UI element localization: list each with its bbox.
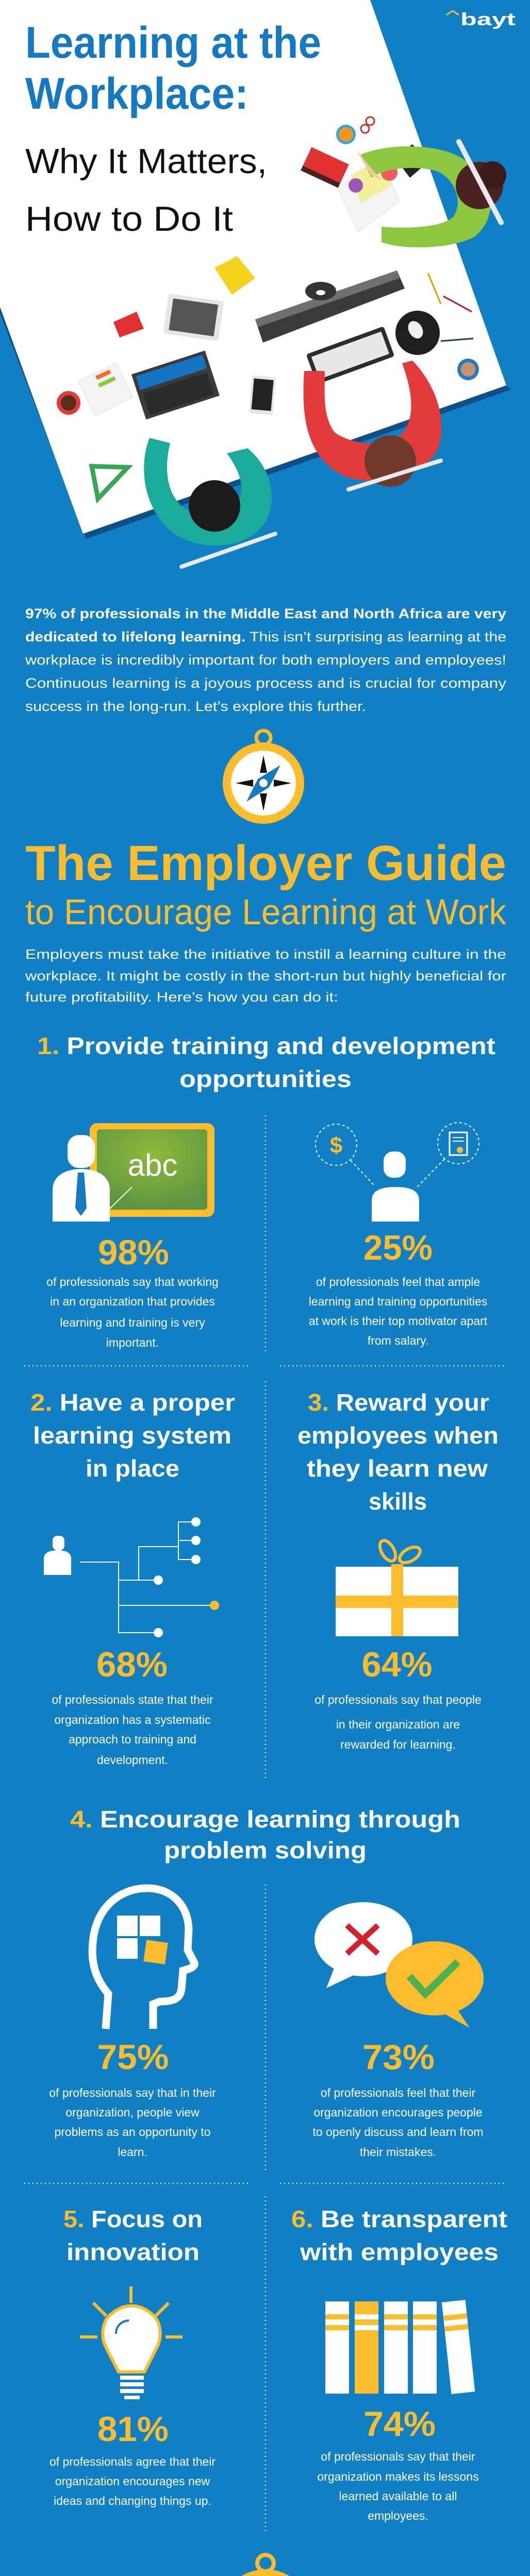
- stat: 81%: ideas and changing things up.: [54, 2494, 211, 2507]
- stat: 68%: [52, 1645, 213, 1767]
- heading 1: [37, 1032, 495, 1092]
- icon: orange cup: [336, 125, 356, 144]
- icon: green person: [356, 142, 506, 247]
- stat: 98%: of professionals say that working: [46, 1275, 219, 1289]
- intro paragraph: success in the long-run. Let’s explore this further.: [25, 699, 366, 714]
- intro paragraph: Continuous learning is a joyous process and is crucial for company: [25, 675, 507, 691]
- icon: teacher with board: abc: [128, 1148, 177, 1182]
- icon: glasses: [361, 117, 374, 133]
- stat: 81%: [49, 2410, 216, 2507]
- employer intro text: [25, 946, 506, 1005]
- stat: 74%: [317, 2404, 479, 2522]
- icon: compass 2: [220, 2555, 311, 2576]
- heading 2: [30, 1389, 235, 1482]
- heading 5: 5. Focus on: [63, 2206, 203, 2232]
- heading: employer guide: The Employer Guide: [25, 836, 506, 891]
- stat: 25%: 25%: [363, 1228, 433, 1267]
- icon: blue coffee: [457, 359, 479, 380]
- stat: 73%: 73%: [362, 2038, 435, 2077]
- icon: papers and tablet: [338, 144, 428, 232]
- heading 4: problem solving: [164, 1837, 367, 1863]
- heading 6: [291, 2206, 507, 2265]
- intro paragraph: [25, 606, 507, 714]
- stat: 64%: of professionals say that people: [314, 1693, 482, 1706]
- icon: person with salary and certificate: $: [330, 1133, 342, 1158]
- icon: head with puzzle: [92, 1888, 194, 2029]
- icon: green triangle: [92, 466, 128, 499]
- stat: 73%: [312, 2038, 484, 2159]
- stat: 68%: development.: [97, 1753, 168, 1767]
- stat: 75%: learn.: [118, 2145, 147, 2159]
- heading 3: skills: [369, 1488, 427, 1515]
- title: [25, 18, 321, 239]
- heading 1: 1. Provide training and development: [37, 1032, 495, 1059]
- logo: bayt top: bayt: [460, 10, 516, 29]
- heading 1: opportunities: [179, 1065, 352, 1092]
- stat: 74%: 74%: [363, 2404, 436, 2444]
- icon: phone: [249, 375, 276, 415]
- stat: 75%: 75%: [97, 2038, 169, 2077]
- icon: keyboard: [306, 326, 394, 384]
- stat: 98%: [46, 1233, 219, 1349]
- stat: 81%: organization encourages new: [55, 2475, 210, 2488]
- stat: 74%: learned available to all: [339, 2489, 457, 2503]
- stat: 64%: 64%: [362, 1645, 432, 1684]
- stat: 25%: [309, 1228, 488, 1347]
- icon: gift: [336, 1538, 458, 1636]
- stat: 75%: problems as an opportunity to: [54, 2125, 211, 2139]
- stat: 98%: 98%: [98, 1233, 169, 1272]
- stat: 74%: organization makes its lessons: [317, 2470, 479, 2483]
- stat: 73%: their mistakes.: [360, 2145, 436, 2159]
- stat: 64%: rewarded for learning.: [340, 1738, 456, 1751]
- employer intro text: workplace. It might be costly in the short-run but highly beneficial for: [25, 968, 506, 984]
- stat: 68%: of professionals state that their: [52, 1693, 213, 1706]
- icon: learning system tree: [44, 1517, 219, 1637]
- employer intro text: future profitability. Here’s how you can do it:: [25, 989, 338, 1005]
- icon: books: [325, 2300, 475, 2394]
- stat: 74%: employees.: [368, 2509, 428, 2522]
- stat: 73%: of professionals feel that their: [321, 2086, 476, 2099]
- intro paragraph: dedicated to lifelong learning. This isn’t surprising as learning at the: [25, 629, 506, 645]
- stat: 75%: organization, people view: [65, 2106, 200, 2119]
- heading 3: employees when: [297, 1422, 499, 1449]
- icon: teal person: [144, 438, 275, 567]
- icon: red book: [301, 147, 349, 188]
- heading 3: 3. Reward your: [308, 1389, 489, 1416]
- title: Workplace:: [25, 69, 249, 118]
- icon: monitor: [255, 270, 405, 343]
- stat: 25%: learning and training opportunities: [309, 1295, 487, 1308]
- heading 6: with employees: [300, 2239, 499, 2265]
- stat: 68%: approach to training and: [69, 1733, 196, 1746]
- stat: 81%: of professionals agree that their: [49, 2455, 216, 2468]
- stat: 81%: 81%: [97, 2410, 169, 2449]
- heading 2: in place: [86, 1455, 179, 1482]
- heading 5: innovation: [67, 2239, 200, 2265]
- stat: 64%: [314, 1645, 482, 1751]
- heading 6: 6. Be transparent: [291, 2206, 507, 2232]
- dividers: [24, 1115, 506, 2576]
- icon: laptop: [131, 350, 220, 419]
- icon: person with salary and certificate: [316, 1123, 479, 1222]
- stat: 68%: 68%: [96, 1645, 168, 1684]
- stat: 73%: organization encourages people: [313, 2106, 483, 2119]
- icon: tablet: [163, 294, 224, 341]
- heading 3: they learn new: [307, 1455, 488, 1482]
- desk illustration: [0, 0, 511, 567]
- stat: 68%: organization has a systematic: [55, 1713, 210, 1726]
- stat: 73%: to openly discuss and learn from: [312, 2125, 484, 2139]
- stat: 98%: learning and training is very: [60, 1316, 205, 1329]
- stat: 64%: in their organization are: [336, 1718, 460, 1731]
- logo: bayt top: [446, 10, 516, 29]
- stat: 75%: of professionals say that in their: [49, 2086, 216, 2099]
- title: Why It Matters,: [25, 142, 267, 181]
- icon: small red notebook: [113, 312, 144, 337]
- intro paragraph: workplace is incredibly important for both employers and employees!: [25, 652, 506, 668]
- icon: speech bubbles: [314, 1902, 484, 2028]
- heading 4: 4. Encourage learning through: [70, 1806, 460, 1833]
- icon: pencils: [428, 273, 473, 341]
- heading 5: [63, 2206, 203, 2265]
- icon: red person: [304, 361, 441, 489]
- heading 4: [70, 1806, 460, 1863]
- heading 2: learning system: [33, 1422, 231, 1449]
- heading: employer guide: [25, 836, 507, 932]
- stat: 74%: of professionals say that their: [321, 2450, 475, 2463]
- icon: teacher with board: [53, 1123, 214, 1222]
- stat: 25%: at work is their top motivator apart: [309, 1314, 488, 1328]
- intro paragraph: 97% of professionals in the Middle East and North Africa are very: [25, 606, 506, 621]
- icon: yellow notebook: [214, 256, 255, 295]
- icon: chart paper and cup: [57, 363, 133, 416]
- heading 2: 2. Have a proper: [30, 1389, 235, 1416]
- icon: mouse pad: [395, 311, 440, 355]
- title: How to Do It: [25, 199, 233, 239]
- stat: 25%: from salary.: [368, 1334, 428, 1347]
- heading 3: [297, 1389, 499, 1515]
- icon: light bulb: [80, 2286, 183, 2399]
- stat: 98%: in an organization that provides: [50, 1295, 215, 1308]
- stat: 98%: important.: [106, 1336, 159, 1349]
- stat: 25%: of professionals feel that ample: [316, 1275, 480, 1289]
- title: Learning at the: [25, 18, 321, 67]
- icon: compass 1: [223, 731, 304, 824]
- employer intro text: Employers must take the initiative to instill a learning culture in the: [25, 946, 506, 962]
- heading: employer guide: to Encourage Learning at Work: [25, 892, 507, 932]
- stat: 75%: [49, 2038, 216, 2159]
